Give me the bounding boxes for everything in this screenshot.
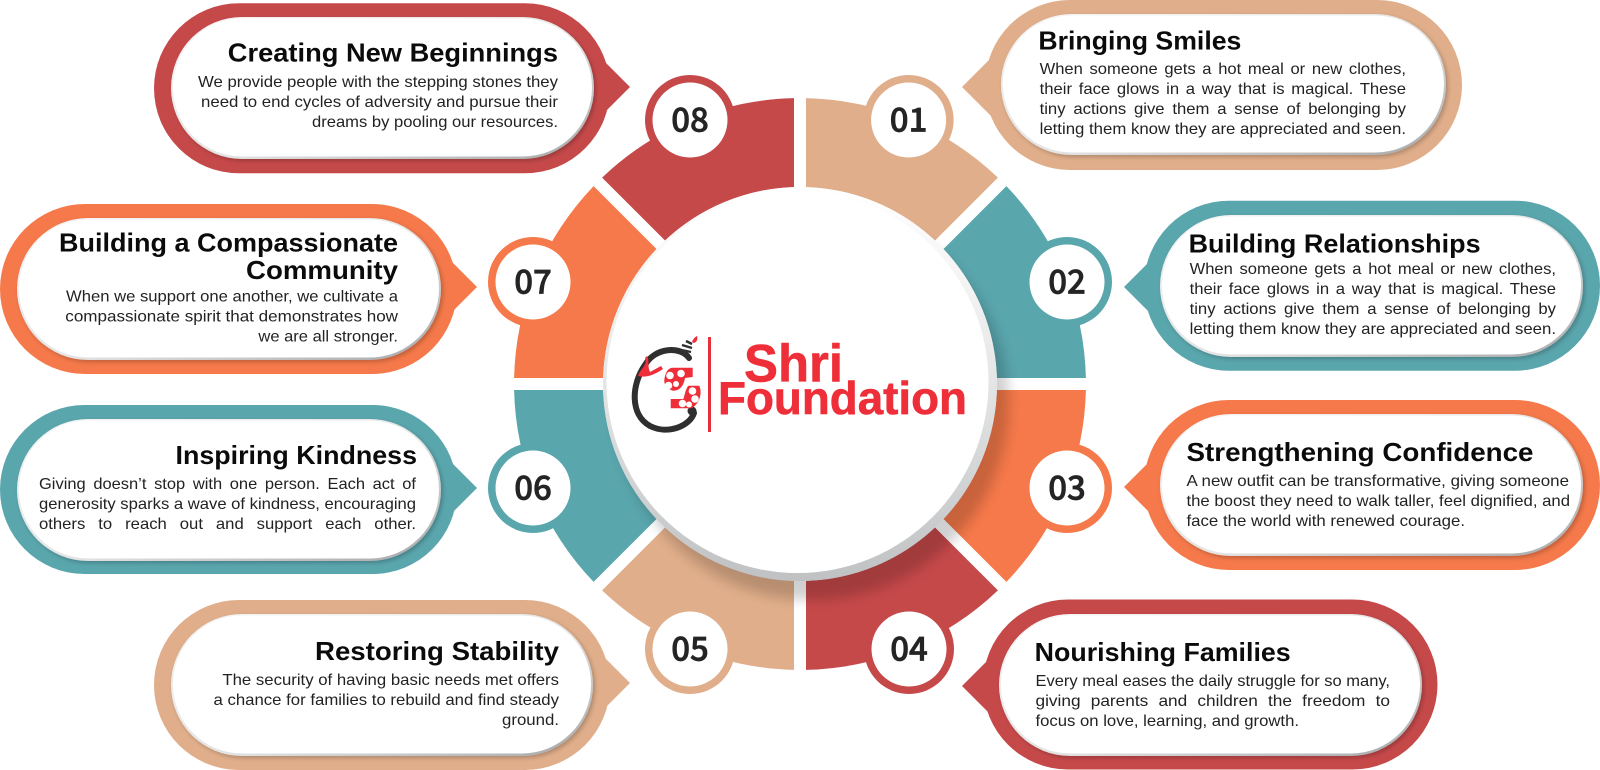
- body text: [214, 672, 559, 729]
- number badge 01: [864, 75, 954, 165]
- number badge 08: 08: [671, 94, 709, 142]
- segment 05: [602, 528, 794, 670]
- body text: [1190, 261, 1556, 338]
- segment 08: [602, 98, 794, 240]
- segment 06: [514, 390, 656, 582]
- panel 03: Strengthening Confidence: [1124, 400, 1600, 570]
- body text: their face glows in a way that is magical. These: [1190, 281, 1556, 298]
- segment 01: [806, 98, 998, 240]
- logo word: Shri: Shri: [744, 334, 843, 394]
- number badge 04: 04: [890, 622, 928, 670]
- body text: [1040, 61, 1406, 138]
- body text: [1186, 473, 1570, 530]
- number badge 05: 05: [671, 622, 709, 670]
- body text: [65, 289, 398, 346]
- body text: others to reach out and support each other.: [39, 516, 416, 533]
- circle rim: [603, 187, 997, 581]
- panel 08: Creating New Beginnings: [154, 3, 630, 173]
- body text: Every meal eases the daily struggle for so many,: [1036, 673, 1390, 690]
- body text: [198, 74, 559, 131]
- heading: Bringing Smiles: [1038, 25, 1241, 55]
- body text: When we support one another, we cultivate a: [66, 289, 398, 306]
- number badge 02: [1022, 237, 1112, 327]
- body text: letting them know they are appreciated and seen.: [1190, 321, 1556, 338]
- body text: face the world with renewed courage.: [1186, 513, 1465, 530]
- number badge 06: 06: [514, 462, 552, 510]
- logo word: Foundation: Foundation: [718, 372, 967, 424]
- logo: Shri Foundation: [635, 334, 967, 432]
- body text: tiny actions give them a sense of belonging by: [1190, 301, 1556, 318]
- number badge 03: [1022, 443, 1112, 533]
- panel 01: Bringing Smiles: [962, 0, 1462, 170]
- body text: We provide people with the stepping stones they: [198, 74, 558, 91]
- body text: A new outfit can be transformative, giving someone: [1186, 473, 1569, 490]
- number badge 01: 01: [890, 94, 927, 142]
- heading: Building a Compassionate: [59, 228, 398, 258]
- heading: Community: [246, 255, 399, 285]
- number badge 08: [645, 75, 735, 165]
- heading: [59, 228, 399, 285]
- body text: letting them know they are appreciated and seen.: [1040, 121, 1406, 138]
- number badge 07: [488, 237, 578, 327]
- number badge 02: 02: [1048, 256, 1086, 304]
- body text: their face glows in a way that is magical. These: [1040, 81, 1406, 98]
- panel 06: Inspiring Kindness: [0, 405, 477, 574]
- body text: The security of having basic needs met offers: [222, 672, 559, 689]
- segment 03: [944, 390, 1086, 582]
- central white circle with logo: [603, 187, 997, 581]
- number badge 04: [864, 604, 954, 694]
- body text: a chance for families to rebuild and find steady: [214, 692, 559, 709]
- body text: tiny actions give them a sense of belonging by: [1040, 101, 1406, 118]
- body text: dreams by pooling our resources.: [312, 114, 558, 131]
- panel 04: Nourishing Families: [962, 600, 1438, 770]
- segment 04: [806, 528, 998, 670]
- heading: Strengthening Confidence: [1186, 437, 1534, 467]
- body text: focus on love, learning, and growth.: [1036, 713, 1299, 730]
- central circle shadow: [615, 206, 1009, 600]
- body text: need to end cycles of adversity and pursue their: [201, 94, 559, 111]
- body text: [1036, 673, 1390, 730]
- number badge 07: 07: [514, 256, 552, 304]
- panel 02: Building Relationships: [1124, 201, 1600, 371]
- body text: generosity sparks a wave of kindness, encouraging: [39, 496, 416, 513]
- heading: Nourishing Families: [1035, 637, 1291, 667]
- heading: Restoring Stability: [315, 636, 560, 666]
- body text: ground.: [502, 712, 559, 729]
- panel 05: Restoring Stability: [154, 600, 630, 770]
- heading: Building Relationships: [1189, 229, 1481, 259]
- number badge 03: 03: [1048, 462, 1086, 510]
- heading: Inspiring Kindness: [176, 440, 417, 470]
- panel 07: Building a Compassionate Community: [0, 204, 477, 374]
- number badge 05: [645, 604, 735, 694]
- logo divider: [708, 337, 711, 432]
- body text: When someone gets a hot meal or new clothes,: [1040, 61, 1406, 78]
- logo icon: Ganesha mark: [635, 336, 701, 430]
- body text: [39, 476, 417, 533]
- body text: giving parents and children the freedom to: [1036, 693, 1390, 710]
- number badge 06: [488, 443, 578, 533]
- body text: compassionate spirit that demonstrates how: [65, 309, 398, 326]
- segment 02: [944, 186, 1086, 378]
- body text: When someone gets a hot meal or new clothes,: [1190, 261, 1556, 278]
- body text: we are all stronger.: [257, 329, 398, 346]
- circular segmented ring: [514, 98, 1086, 670]
- body text: the boost they need to walk taller, feel dignified, and: [1186, 493, 1570, 510]
- circle face: [606, 191, 988, 573]
- heading: Creating New Beginnings: [228, 38, 558, 68]
- segment 07: [514, 186, 656, 378]
- body text: Giving doesn’t stop with one person. Each act of: [39, 476, 417, 493]
